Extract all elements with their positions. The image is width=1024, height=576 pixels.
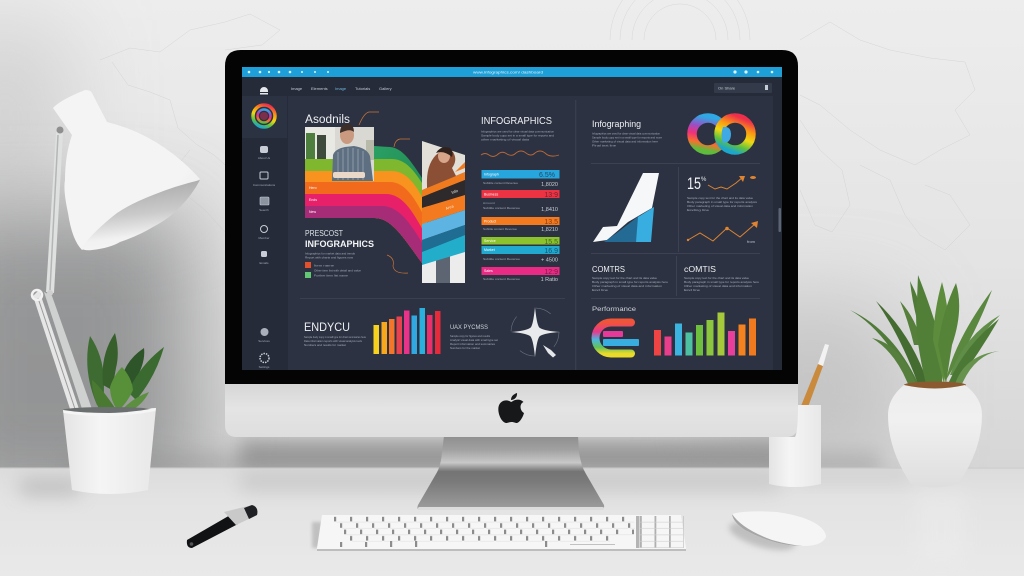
black bezel [225, 50, 798, 384]
text block: COMTRS: Sample copy text for the chart and its data value [592, 276, 657, 280]
text block: precost infographics: Report with charts and figures now [305, 256, 354, 260]
sidebar menu items: Emails [259, 261, 269, 265]
top blue bar [242, 67, 782, 77]
sidebar menu items: Settings [259, 365, 270, 369]
panel: bottom left bar chart: Analytic visual data with small type set [450, 338, 498, 342]
stat: 15 percent: Other marketing of visual data and information [687, 204, 753, 208]
stat bars: Sales [484, 269, 493, 273]
text block: precost infographics: PRESCOST [305, 229, 343, 238]
stat bars: Amount [483, 201, 495, 205]
lamp opening [81, 180, 200, 250]
line chart [687, 221, 758, 244]
orange wave line [481, 151, 559, 156]
desk surface [0, 468, 1024, 576]
stat bars: 13.5 [544, 219, 558, 226]
sidebar menu items [253, 146, 276, 369]
key gaps [334, 516, 635, 547]
stat: 15 percent [687, 174, 758, 212]
text block: UAX PYCMSS [450, 325, 488, 331]
panel: bottom left bar chart: Sample body copy in small type for chart summaries here [304, 335, 366, 339]
text block: precost infographics: Further item list name [314, 274, 348, 278]
text block: cOMTIS: End line [684, 288, 700, 292]
stat bars [482, 170, 560, 283]
text block: COMTRS [592, 264, 668, 292]
bar chart [654, 312, 756, 356]
scrollbar [778, 208, 781, 232]
lamp [32, 90, 200, 412]
icon: rainbow E logo [596, 322, 639, 354]
top navigation: Image [291, 86, 303, 91]
stat bars: Service [484, 239, 496, 243]
keyboard [312, 515, 686, 551]
text block: cOMTIS: Body paragraph in small type for reports analysis here [684, 280, 759, 284]
stat: 15 percent: Ending line [687, 208, 709, 212]
silver chin [225, 380, 798, 437]
stat: 15 percent: Body paragraph in small type for reports analysis [687, 200, 758, 204]
stat bars: 6.5% [539, 172, 555, 179]
text block: precost infographics [305, 229, 374, 278]
stat: 15 percent: % [701, 177, 707, 183]
folded right column: Info [451, 188, 459, 195]
plant pot: left [63, 407, 156, 494]
top navigation: Elements [311, 86, 328, 91]
monitor stand [417, 436, 604, 510]
folded right column: Area [445, 203, 455, 211]
plant pot: right [888, 382, 982, 488]
ribbon bands [305, 146, 430, 263]
sidebar menu items: About Us [258, 156, 271, 160]
text block: COMTRS: End line [592, 288, 608, 292]
heading: performance: Performance [592, 306, 636, 313]
sidebar menu items: Member [258, 236, 270, 240]
sidebar menu items: Communications [253, 183, 276, 187]
icon: apple logo [498, 393, 524, 423]
stat bars: Infograph [484, 172, 499, 176]
stat bars: Subtitle content Revenue [483, 227, 517, 231]
stat bars: 13:9 [544, 192, 558, 199]
ribbon bands: New [309, 210, 316, 214]
panel: right column: Sample body copy set in a small type for reports and more [592, 136, 662, 140]
text block: cOMTIS: Sample copy text for the chart and its data value [684, 276, 749, 280]
cup [769, 405, 821, 487]
monitor body [225, 50, 798, 437]
text block: COMTRS: Other marketing of visual data and information [592, 284, 662, 288]
icon: angular A logo [593, 173, 659, 242]
stat bars: Market [484, 248, 495, 252]
stat: 15 percent: Sample copy text for the chart and its data value [687, 196, 753, 200]
stat bars: Subtitle content Revenue [483, 257, 520, 261]
sidebar menu items: Services [258, 339, 270, 343]
text block: precost infographics: Infographics for market data and trends [305, 252, 355, 256]
photo: woman at desk [422, 141, 465, 190]
lamp shade [53, 90, 200, 250]
panel: right column: Final text line [592, 144, 616, 148]
icon: circular rainbow logo [253, 105, 275, 127]
icon: rainbow linked rings [692, 118, 751, 150]
heading: Infographing: Infographing [592, 119, 641, 130]
stat bars: Subtitle content Revenue [483, 206, 520, 210]
panel: bottom left bar chart: Data information reports with visual analysis tools [304, 339, 362, 343]
ribbon bands: Ends [309, 198, 317, 202]
text block: cOMTIS: Other marketing of visual data and information [684, 284, 752, 288]
stat bars: 1,8410 [541, 207, 558, 213]
panel: bottom left bar chart: Numbers and results for market [304, 343, 346, 347]
panel: infographics stat bars [481, 115, 560, 283]
numeric keys [636, 516, 684, 548]
text block: precost infographics: Item name [314, 264, 334, 268]
plant: large aloe [850, 275, 1000, 384]
orange callouts [359, 112, 410, 273]
ribbon bands: Afgo [309, 175, 316, 179]
pen [187, 505, 257, 548]
stat bars: 1,8210 [541, 227, 558, 233]
stat bars: + 4500 [541, 258, 558, 264]
top navigation: Image [335, 86, 347, 91]
plant: small succulent [87, 333, 164, 412]
stat bars: 15.5 [544, 239, 558, 246]
pencil [801, 364, 823, 407]
mouse [726, 511, 826, 556]
stat bars: Subtitle content Revenue [483, 181, 518, 185]
text block: COMTRS: Body paragraph in small type for reports analysis here [592, 280, 668, 284]
stat: 15 percent: 15 [687, 174, 701, 193]
sidebar menu items: Search [259, 208, 269, 212]
stat bars: 1 Ratio [541, 277, 558, 283]
faint world map on wall [100, 0, 975, 250]
pen cup with pencil [769, 344, 829, 487]
panel: bottom left bar chart [300, 298, 565, 358]
screen [242, 67, 782, 370]
line chart: from [747, 239, 756, 244]
photo: man in striped shirt [305, 124, 374, 181]
heading: INFOGRAPHICS: INFOGRAPHICS [481, 115, 552, 127]
stat bars: 12:9 [544, 269, 558, 276]
top navigation: On Share [718, 86, 736, 90]
top navigation [291, 83, 772, 93]
top navigation: Gallery [379, 86, 392, 91]
heading: Asodnils: Asodnils [305, 114, 350, 126]
top blue bar: www.infographics.com/ dashboard [473, 70, 543, 74]
sidebar [242, 87, 287, 369]
heading: ENDYCU: ENDYCU [304, 322, 350, 334]
text block: COMTRS: COMTRS [592, 264, 625, 274]
stat bars: Business [484, 192, 498, 196]
top navigation: Tutorials [355, 86, 370, 91]
panel: left ribbon infographic [305, 112, 465, 283]
panel: right column: Infographics are used for clear visual data communication [592, 132, 660, 136]
stat bars: 1,8020 [541, 182, 558, 188]
text block: cOMTIS: cOMTIS [684, 264, 716, 274]
stat bars: Product [484, 220, 496, 224]
text block: precost infographics: INFOGRAPHICS [305, 239, 374, 250]
panel: bottom left bar chart: Sample copy for figures and results [450, 334, 490, 338]
stat bars: 16.9 [544, 248, 558, 255]
main panel background [288, 96, 773, 370]
bar chart [374, 308, 440, 354]
panel: right column [576, 100, 760, 370]
folded right column [422, 172, 465, 283]
ribbon bands: Lime [309, 162, 317, 166]
panel: bottom left bar chart: Report information and summaries [450, 342, 495, 346]
panel: bottom left bar chart: Numbers for the market [450, 346, 480, 350]
stat bars: Subtitle content Revenue [483, 277, 520, 281]
text block: cOMTIS [684, 264, 759, 292]
text block: precost infographics: Other item list with detail and value [314, 268, 361, 272]
panel: right column: Other marketing of visual data and information here [592, 140, 658, 144]
icon: four point star with cursor [511, 307, 560, 358]
ribbon bands: Hero [309, 186, 317, 190]
lamp arm [32, 126, 93, 412]
panel: infographics stat bars: Infographics are used for clear visual data communication [481, 130, 554, 134]
panel: infographics stat bars: other marketing of visual data [481, 138, 529, 142]
panel: infographics stat bars: Sample body copy set in a small type for reports and [481, 134, 554, 138]
